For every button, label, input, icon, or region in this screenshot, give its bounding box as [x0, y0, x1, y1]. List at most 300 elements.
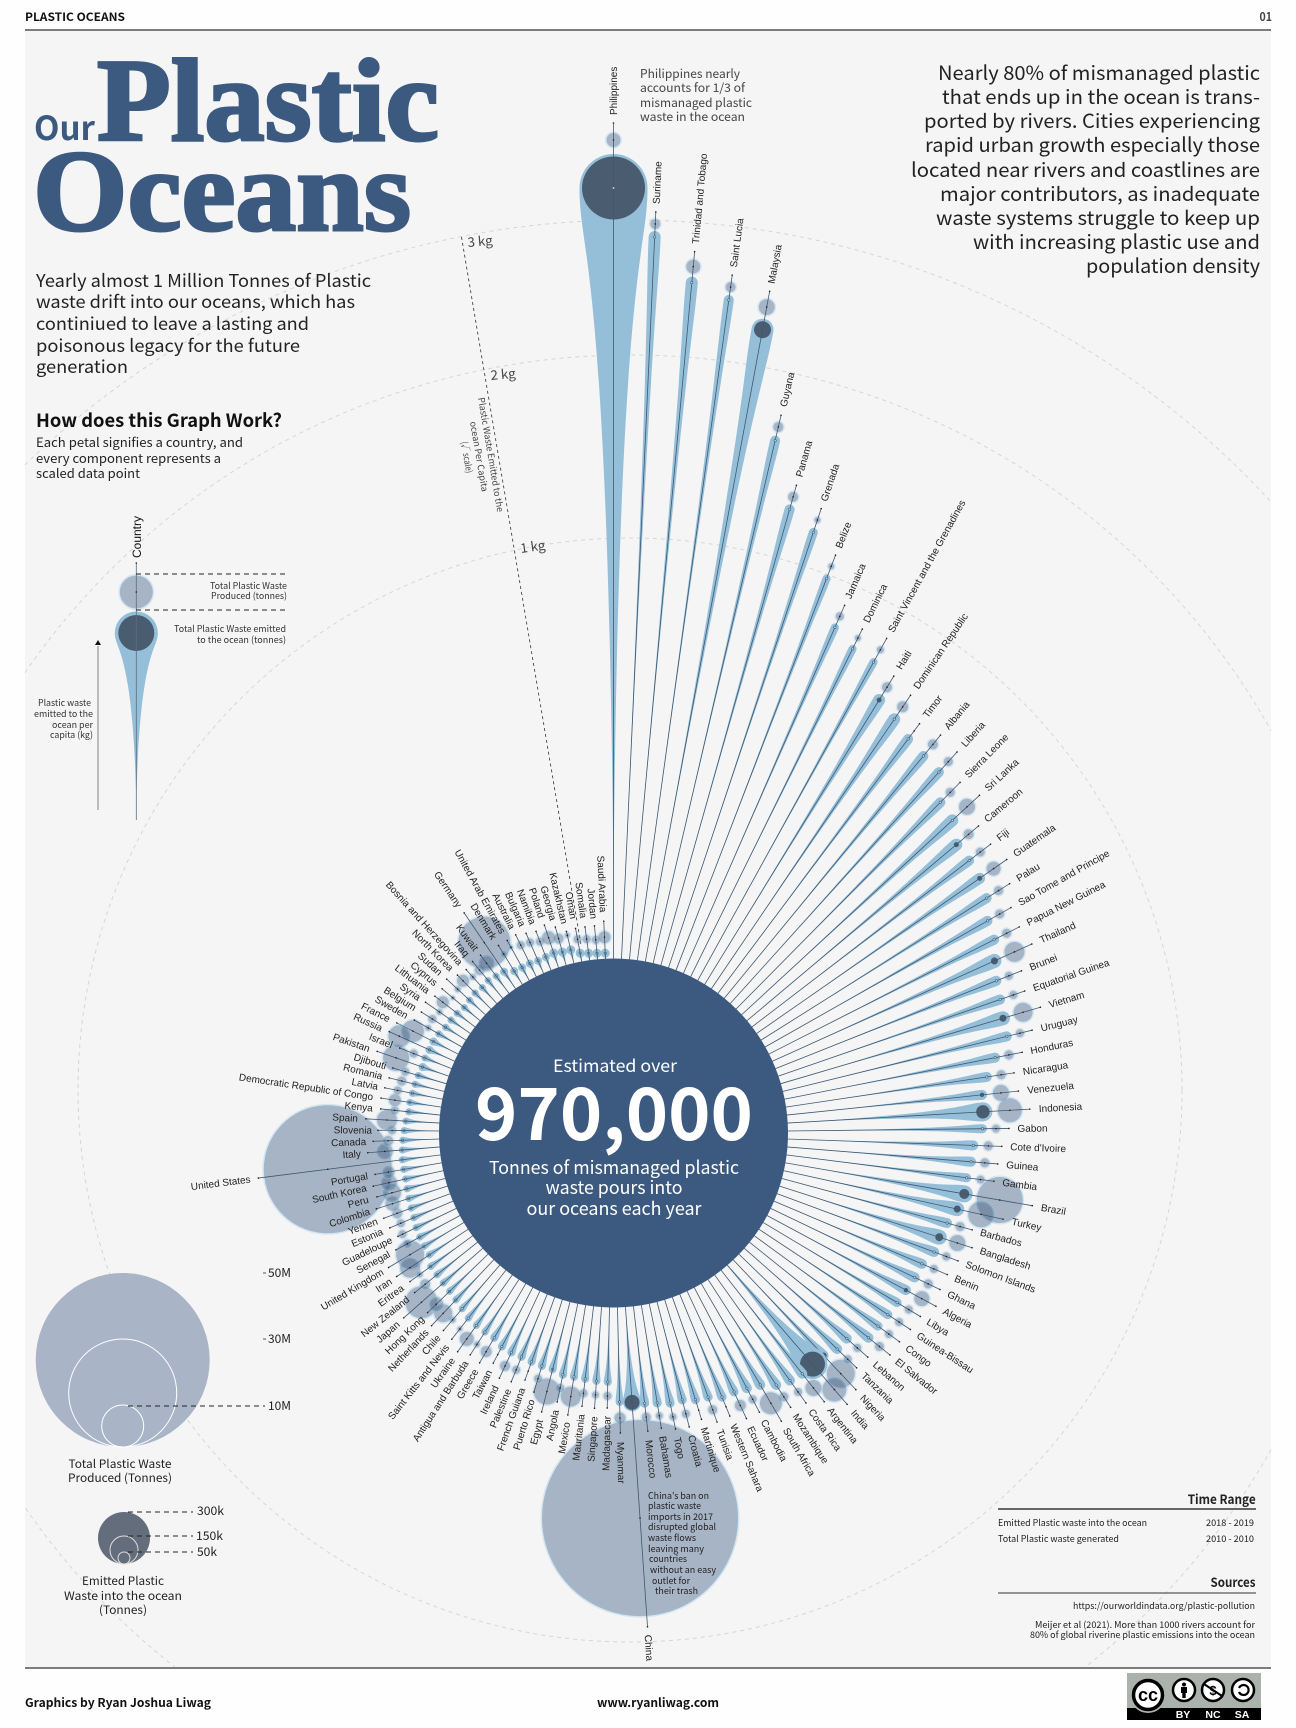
petal: Italy: Italy [342, 1149, 361, 1161]
petal: Sudan [415, 951, 489, 1020]
petal: Saint Kitts and Nevis: Saint Kitts and Nevis [386, 1343, 452, 1422]
petal: Portugal: Portugal [330, 1171, 369, 1188]
petal: Guyana [648, 371, 797, 965]
petal: Estonia [350, 1197, 456, 1250]
petal: Germany [415, 858, 537, 1004]
petal: Venezuela [786, 1077, 1075, 1123]
petal: Barbados: Barbados [979, 1228, 1023, 1249]
petal: Haiti: Haiti [895, 649, 915, 672]
time range: Time Range [1188, 1489, 1256, 1508]
petal: United Arab Emirates: United Arab Emirates [452, 848, 507, 936]
petal: Australia: Australia [489, 892, 517, 932]
philippines note: waste in the ocean [640, 108, 745, 125]
philippines note: mismanaged plastic [640, 94, 752, 111]
petal: Guadeloupe: Guadeloupe [341, 1235, 395, 1269]
petal: United States [183, 1091, 449, 1250]
petal: Taiwan [471, 1285, 539, 1401]
petal: Singapore: Singapore [586, 1416, 601, 1462]
petal: Indonesia [787, 1094, 1083, 1135]
petal: Algeria [763, 1209, 975, 1332]
sources: Meijer et al (2021). More than 1000 rivers account for [1035, 1618, 1255, 1631]
china callout [648, 1488, 716, 1597]
petal: Albania: Albania [943, 699, 973, 732]
petal: Madagascar: Madagascar [601, 1415, 614, 1471]
legend: emitted plastic waste: 300k [197, 1502, 224, 1519]
legend: total plastic waste produced: Total Plastic Waste [68, 1456, 172, 1472]
petal: Liberia: Liberia [960, 720, 988, 750]
petal: Jordan [585, 888, 602, 962]
petal: Syria [397, 982, 473, 1039]
petal: Brunei [773, 952, 1059, 1075]
petal: Guinea-Bissau [755, 1225, 975, 1376]
petal: Saint Kitts and Nevis [386, 1267, 511, 1422]
petal: Belize: Belize [834, 520, 854, 550]
central circle: 970,000 [475, 1056, 753, 1161]
petal: Gabon: Gabon [1017, 1124, 1048, 1135]
legend: total plastic waste produced: 50M [268, 1264, 291, 1281]
petal: New Zealand [359, 1238, 482, 1340]
time range: 2018 - 2019 [1206, 1516, 1254, 1529]
petal: Costa Rica [709, 1272, 844, 1454]
right paragraph: population density [1086, 250, 1260, 279]
icon: creative commons badge: $ [1209, 1683, 1217, 1698]
petal: Morocco [627, 1305, 658, 1479]
petal: Hong Kong: Hong Kong [383, 1314, 427, 1357]
petal: Nigeria: Nigeria [857, 1393, 887, 1424]
intro text: waste drift into our oceans, which has [36, 289, 355, 314]
petal: Palestine: Palestine [488, 1387, 514, 1430]
petal: Morocco: Morocco [642, 1439, 658, 1479]
petal: Chile [420, 1262, 505, 1358]
petal: Latvia: Latvia [351, 1077, 379, 1093]
petal: Philippines [580, 67, 648, 959]
petal: Indonesia: Indonesia [1039, 1102, 1083, 1115]
petal: French Guiana: French Guiana [496, 1386, 528, 1453]
petal: Grenada [664, 462, 842, 970]
sources: 80% of global riverine plastic emissions into the ocean [1030, 1628, 1255, 1641]
china callout: their trash [655, 1583, 698, 1597]
petal: Eritrea [376, 1232, 477, 1310]
petal: French Guiana [496, 1295, 561, 1453]
philippines note: Philippines nearly [640, 65, 741, 82]
petal: Romania [342, 1062, 446, 1098]
petal: Sweden: Sweden [373, 994, 410, 1022]
petal: India: India [848, 1408, 871, 1432]
petal: Ukraine [427, 1271, 518, 1391]
petal: Mauritania: Mauritania [571, 1413, 588, 1461]
petal: Fiji: Fiji [995, 827, 1012, 844]
petal: Democratic Republic of Congo: Democratic Republic of Congo [238, 1072, 374, 1103]
petal: Brazil [781, 1140, 1070, 1234]
petal: Cameroon [743, 785, 1025, 1026]
petal: Gambia: Gambia [1002, 1178, 1038, 1193]
petal: Mozambique [702, 1276, 831, 1466]
china callout: without an easy [650, 1562, 716, 1576]
china callout: outlet for [652, 1573, 690, 1587]
right paragraph: with increasing plastic use and [973, 226, 1260, 255]
petal: Iraq [451, 939, 507, 1003]
petal: Romania: Romania [342, 1062, 384, 1083]
time range: 2010 - 2010 [1206, 1532, 1254, 1545]
petal: Honduras: Honduras [1030, 1038, 1074, 1057]
petal: Mexico [552, 1303, 596, 1455]
petal: Gabon [787, 1124, 1048, 1137]
petal: Honduras [783, 1037, 1074, 1106]
petal: Thailand [768, 915, 1079, 1070]
header bar: PLASTIC OCEANS [25, 9, 125, 25]
icon: creative commons badge: NC [1205, 1709, 1221, 1721]
petal: Equatorial Guinea [776, 957, 1111, 1082]
y axis: per capita scale: (√ scale) [458, 440, 476, 474]
petal: Latvia [351, 1077, 444, 1106]
legend: total plastic waste produced: Produced (Tonnes) [68, 1470, 172, 1486]
petal: Malaysia: Malaysia [767, 243, 785, 285]
petal: Ireland [478, 1289, 546, 1416]
petal: Palau: Palau [1015, 861, 1042, 884]
right paragraph: ported by rivers. Cities experiencing [924, 105, 1260, 134]
petal: Georgia [538, 885, 571, 967]
petal: Haiti [699, 648, 915, 988]
petal: South Korea: South Korea [311, 1183, 368, 1206]
petal: Philippines: Philippines [609, 67, 620, 115]
legend: emitted plastic waste: (Tonnes) [99, 1602, 147, 1618]
petal: Oman [562, 891, 586, 964]
petal: Italy [342, 1139, 441, 1163]
petal: Guyana: Guyana [779, 371, 797, 408]
petal: Colombia [327, 1179, 450, 1231]
petal: Iran [371, 1221, 474, 1298]
intro text: Yearly almost 1 Million Tonnes of Plastic [35, 268, 371, 293]
petal: Equatorial Guinea: Equatorial Guinea [1032, 958, 1111, 994]
y axis: per capita scale [458, 230, 581, 945]
petal: Sierra Leone [732, 731, 1012, 1014]
petal: Japan [367, 1236, 494, 1353]
petal: Bulgaria [502, 891, 548, 976]
petal: Gambia [785, 1150, 1038, 1193]
petal: Russia: Russia [351, 1012, 384, 1035]
petal: Israel [367, 1032, 453, 1075]
petal: Tunisia [666, 1295, 735, 1462]
petal: Guinea [786, 1142, 1039, 1174]
how-to legend petal [95, 516, 285, 820]
petal: Iran: Iran [374, 1277, 394, 1295]
petal: Vietnam [778, 985, 1087, 1093]
petal: Israel: Israel [367, 1032, 394, 1051]
petal: Portugal [330, 1157, 443, 1188]
central circle: waste pours into [546, 1174, 682, 1200]
petal: Dominican Republic [706, 611, 971, 993]
y axis: per capita scale: ocean Per Capita [467, 420, 492, 493]
petal: Croatia: Croatia [685, 1434, 704, 1468]
petal: Greece: Greece [455, 1367, 481, 1401]
petal: Venezuela: Venezuela [1027, 1081, 1075, 1097]
china callout: leaving many [648, 1541, 704, 1555]
petal: Tunisia: Tunisia [714, 1428, 735, 1462]
petal: Senegal [355, 1211, 463, 1277]
petal: Turkey: Turkey [1010, 1217, 1042, 1234]
header bar [25, 8, 1272, 31]
y axis: per capita scale: 2 kg [490, 363, 517, 384]
petal: Mexico: Mexico [557, 1421, 573, 1455]
petal: Sierra Leone: Sierra Leone [963, 732, 1012, 781]
petal: France: France [359, 1001, 392, 1025]
central circle [439, 958, 788, 1308]
right paragraph: waste systems struggle to keep up [936, 202, 1260, 231]
petal: Slovenia [334, 1125, 440, 1137]
footer [25, 1667, 1271, 1711]
petal: Russia [350, 1006, 459, 1071]
central circle: our oceans each year [526, 1195, 703, 1221]
petal: South Africa: South Africa [780, 1426, 817, 1479]
intro text: continiued to leave a lasting and [36, 311, 309, 336]
philippines note [640, 65, 752, 125]
petal: Panama: Panama [795, 439, 815, 478]
petal: Nicaragua: Nicaragua [1022, 1060, 1069, 1078]
petal: Lithuania [392, 962, 479, 1032]
china callout: countries [649, 1551, 687, 1565]
petal: Syria: Syria [397, 982, 423, 1004]
china callout: plastic waste [648, 1498, 701, 1512]
y axis: per capita scale: 3 kg [467, 230, 494, 251]
right paragraph: that ends up in the ocean is trans- [942, 81, 1260, 110]
petal: Argentina: Argentina [824, 1406, 860, 1446]
petal: Japan: Japan [375, 1319, 402, 1346]
petal: Mauritania [571, 1305, 600, 1461]
petal: Uruguay [781, 1014, 1079, 1098]
petal: Cyprus: Cyprus [408, 960, 439, 989]
petal: Panama [656, 439, 815, 967]
petal: United Kingdom [314, 1210, 471, 1320]
petal: Brunei: Brunei [1028, 953, 1059, 974]
petal: Brazil: Brazil [1040, 1203, 1067, 1218]
how-to legend labels: capita (kg) [50, 728, 93, 741]
petal: Fiji [749, 827, 1012, 1032]
y axis: per capita scale: 1 kg [519, 535, 547, 557]
petal: Pakistan: Pakistan [331, 1032, 371, 1055]
petal: Pakistan [329, 1024, 453, 1088]
petal: Egypt [521, 1298, 583, 1448]
how does this graph work [36, 407, 282, 482]
petal: Tanzania: Tanzania [859, 1371, 895, 1407]
how-to legend labels [34, 579, 287, 741]
icon: creative commons badge: BY [1176, 1709, 1190, 1721]
petal: Democratic Republic of Congo [238, 1071, 442, 1114]
petal: Puerto Rico [512, 1298, 569, 1452]
petal: Bangladesh [777, 1178, 1033, 1274]
title [33, 35, 439, 256]
petal: Algeria: Algeria [941, 1307, 974, 1331]
legend: total plastic waste produced: 30M [268, 1330, 291, 1347]
petal: Dominica: Dominica [862, 582, 890, 625]
petal: Ghana [768, 1204, 978, 1312]
petal: Western Sahara: Western Sahara [727, 1423, 765, 1494]
petal: Lebanon [740, 1244, 907, 1394]
sources: Sources [1210, 1572, 1256, 1591]
title: Plastic [97, 35, 439, 166]
petal: Turkey [781, 1158, 1044, 1240]
petal: United Kingdom: United Kingdom [319, 1267, 386, 1313]
footer: Graphics by Ryan Joshua Liwag [25, 1694, 211, 1711]
petal: Solomon Islands [774, 1189, 1037, 1296]
petal: Thailand: Thailand [1038, 920, 1078, 946]
petal: Peru: Peru [347, 1195, 370, 1211]
petal: Namibia [514, 888, 555, 973]
petal: Saint Lucia [632, 217, 747, 962]
petal: Western Sahara [674, 1292, 765, 1494]
petal: Singapore [586, 1306, 608, 1462]
petal: Martinique [658, 1298, 722, 1474]
petal: Trinidad and Tobago [622, 152, 711, 960]
petal: Puerto Rico: Puerto Rico [512, 1398, 538, 1452]
petal: Suriname [615, 161, 665, 959]
petal: Benin: Benin [952, 1274, 980, 1294]
petal: Sweden [373, 994, 464, 1053]
petal: Poland: Poland [526, 887, 546, 920]
petal: Liberia [726, 719, 988, 1008]
petal: Saint Vincent and the Grenadines: Saint Vincent and the Grenadines [887, 498, 968, 635]
petal: Costa Rica: Costa Rica [806, 1407, 843, 1454]
petal: Jamaica [679, 562, 869, 976]
petal: Georgia: Georgia [538, 885, 558, 923]
central circle: Tonnes of mismanaged plastic [489, 1154, 739, 1180]
petal: Kuwait [452, 921, 516, 998]
petal: Timor: Timor [921, 693, 946, 720]
petal: Barbados [780, 1174, 1023, 1249]
petal: Madagascar [601, 1307, 616, 1471]
petal: Kuwait: Kuwait [453, 923, 480, 954]
petal: Sri Lanka: Sri Lanka [983, 757, 1022, 794]
petal: Nigeria [723, 1250, 894, 1429]
petal: Eritrea: Eritrea [376, 1283, 407, 1310]
petal: Malaysia [634, 242, 789, 964]
sources: https://ourworldindata.org/plastic-pollution [1073, 1599, 1255, 1612]
footer: www.ryanliwag.com [597, 1694, 719, 1711]
petal: Uruguay: Uruguay [1040, 1015, 1079, 1034]
petal: Bulgaria: Bulgaria [502, 891, 527, 929]
y axis: per capita scale: Plastic Waste Emitted to the [475, 396, 507, 513]
petal: Yemen [347, 1189, 453, 1238]
how-to legend labels: ocean per [52, 718, 93, 731]
petal: Bangladesh: Bangladesh [978, 1246, 1032, 1273]
title: Oceans [33, 128, 411, 256]
petal: Antigua and Barbuda [411, 1277, 525, 1444]
legend: emitted plastic waste [64, 1502, 224, 1618]
legend: emitted plastic waste: Emitted Plastic [82, 1573, 164, 1589]
petal: Jordan: Jordan [585, 888, 598, 919]
intro text: generation [36, 354, 128, 379]
petal: Nicaragua [785, 1060, 1069, 1114]
petal: Ghana: Ghana [945, 1289, 977, 1312]
petal: Bahamas [635, 1304, 674, 1479]
how-to legend labels: Total Plastic Waste emitted [174, 622, 286, 635]
legend: total plastic waste produced [36, 1264, 291, 1486]
right paragraph: located near rivers and coastlines are [911, 154, 1260, 183]
petal: Netherlands [383, 1253, 501, 1376]
petal: Peru [346, 1170, 448, 1213]
petal: Sudan: Sudan [415, 951, 444, 978]
petal: Dominican Republic: Dominican Republic [912, 612, 971, 691]
petal: Papua New Guinea [766, 879, 1108, 1060]
icon: creative commons badge: SA [1235, 1709, 1250, 1721]
petal: Martinique: Martinique [698, 1426, 722, 1474]
petal: Colombia: Colombia [328, 1207, 372, 1230]
petal: Angola: Angola [545, 1409, 562, 1442]
petal: Ecuador: Ecuador [744, 1425, 770, 1464]
petal: Dominica [687, 582, 890, 980]
petal: Togo: Togo [671, 1436, 686, 1460]
petal: El Salvador: El Salvador [892, 1357, 940, 1398]
how does this graph work: every component represents a [36, 448, 221, 467]
petal: Lebanon: Lebanon [870, 1360, 907, 1394]
petal: Guadeloupe [341, 1204, 459, 1269]
icon: creative commons badge [1127, 1673, 1261, 1721]
petal: Mozambique: Mozambique [790, 1412, 830, 1466]
how-to legend labels: emitted to the [34, 707, 93, 720]
time range: Total Plastic waste generated [998, 1532, 1119, 1545]
petal: Guinea: Guinea [1006, 1160, 1039, 1174]
petal: Namibia: Namibia [514, 888, 538, 927]
petal: Somalia: Somalia [572, 882, 588, 919]
icon: creative commons badge: cc [1138, 1685, 1158, 1705]
petal: Djibouti [352, 1052, 448, 1090]
petal: North Korea: North Korea [409, 928, 455, 974]
petal: Bosnia and Herzegovina: Bosnia and Herzegovina [383, 880, 464, 968]
petal: Ukraine: Ukraine [429, 1356, 458, 1390]
intro text: poisonous legacy for the future [36, 333, 300, 358]
petal: Myanmar [611, 1307, 627, 1484]
petal: Spain: Spain [332, 1112, 358, 1125]
right paragraph: Nearly 80% of mismanaged plastic [938, 57, 1260, 86]
petal: United States: United States [190, 1175, 251, 1193]
petal: Taiwan: Taiwan [471, 1368, 495, 1401]
how-to legend petal: Country [130, 516, 144, 558]
petal: Bahamas: Bahamas [656, 1435, 674, 1479]
petal: China [528, 1300, 748, 1668]
petal: Timor [714, 693, 946, 998]
petal: Netherlands: Netherlands [386, 1328, 431, 1374]
petal: United Arab Emirates [452, 848, 533, 984]
petal: South Korea [310, 1163, 445, 1208]
petal: Greece [454, 1281, 532, 1401]
petal: Senegal: Senegal [355, 1249, 392, 1277]
petal: Jamaica: Jamaica [844, 562, 869, 601]
petal: Croatia [651, 1300, 704, 1468]
petal: China: China [642, 1635, 654, 1662]
petal: Argentina [715, 1265, 862, 1447]
petal: Australia [489, 892, 540, 980]
petal: Saint Lucia: Saint Lucia [729, 217, 747, 268]
petal: Estonia: Estonia [350, 1227, 385, 1250]
petal: Canada [331, 1134, 440, 1149]
petal: Vietnam: Vietnam [1048, 990, 1086, 1011]
petal: Congo [750, 1232, 933, 1370]
how-to legend labels: Total Plastic Waste [210, 579, 287, 592]
petal: Chile: Chile [420, 1333, 444, 1358]
petal: Kazakhstan [546, 872, 578, 965]
petal: Palestine [488, 1292, 553, 1430]
petal: Togo [643, 1302, 686, 1460]
china callout: waste flows [648, 1530, 696, 1544]
petal: Antigua and Barbuda: Antigua and Barbuda [411, 1359, 472, 1444]
petal: Libya [759, 1218, 951, 1339]
petal: Sao Tome and Principe [762, 848, 1112, 1053]
petal: France [357, 995, 463, 1064]
petal: Yemen: Yemen [347, 1216, 380, 1238]
petal: Saudi Arabia: Saudi Arabia [594, 855, 608, 913]
petal: Saudi Arabia [594, 855, 612, 961]
petal: Ecuador [681, 1288, 771, 1464]
how does this graph work: scaled data point [36, 463, 140, 482]
